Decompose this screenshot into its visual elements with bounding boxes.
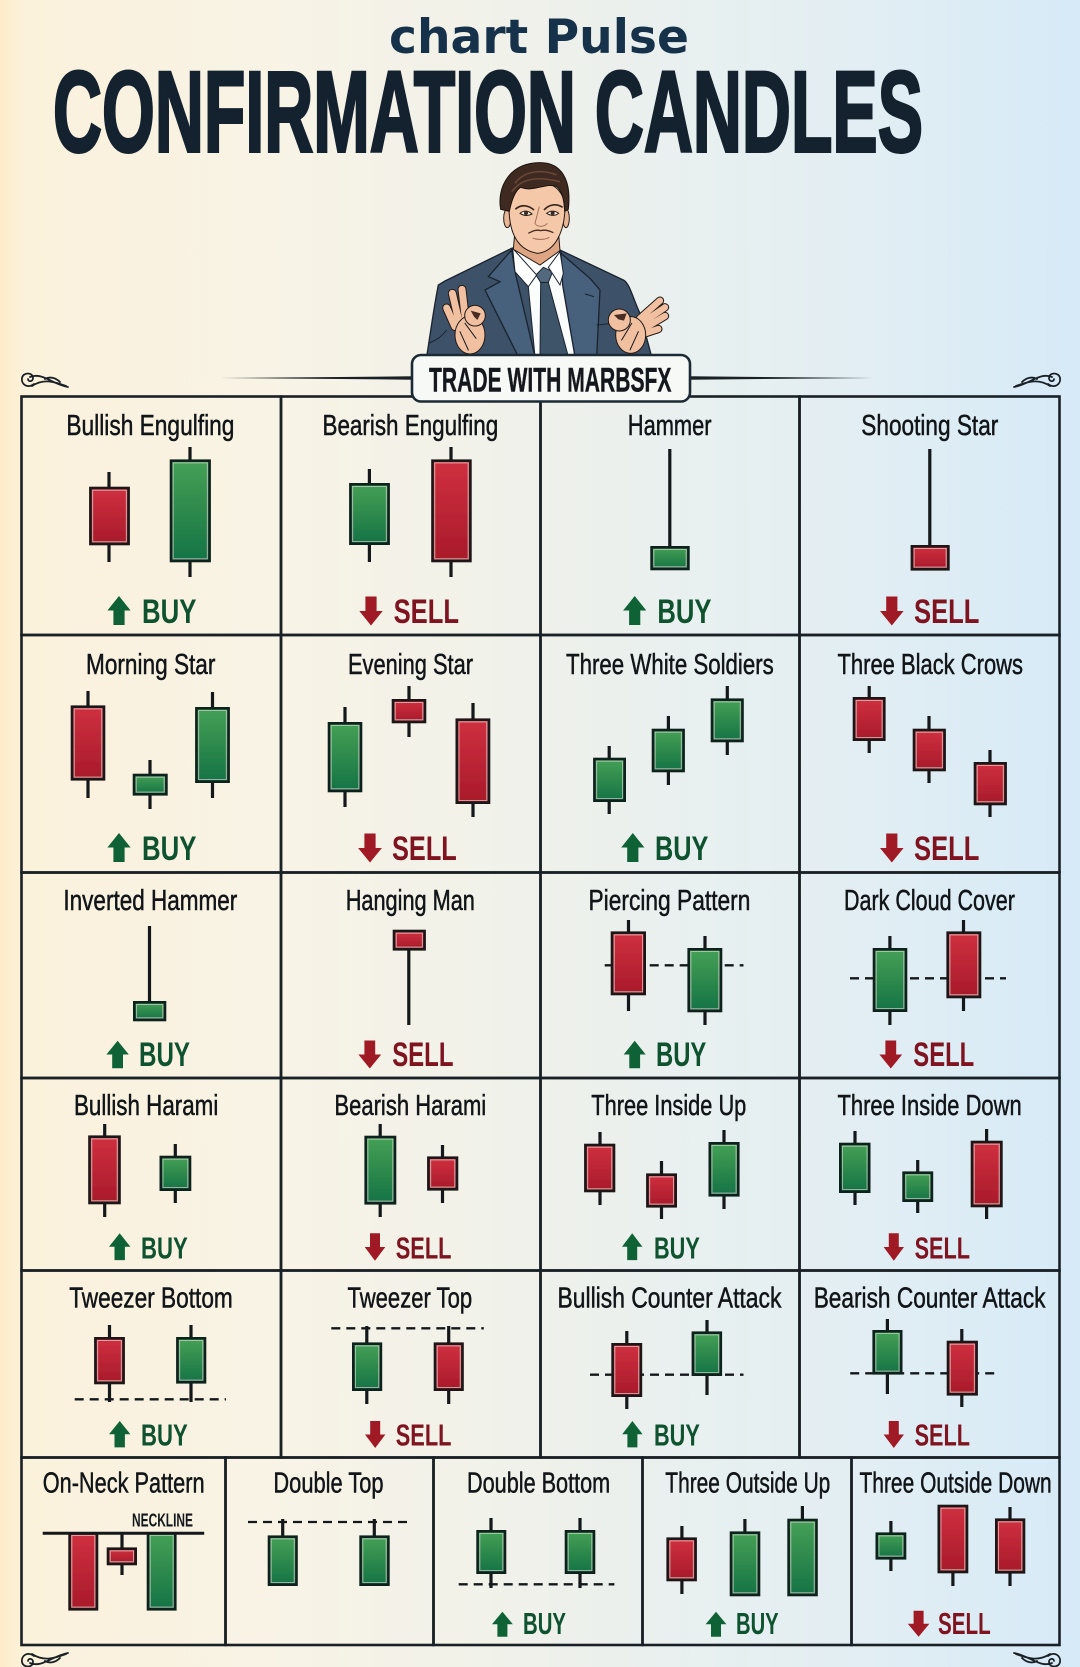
signal: BUY bbox=[622, 1417, 700, 1452]
banner rule: right bbox=[690, 376, 873, 380]
candlesticks bbox=[840, 1129, 1001, 1219]
signal: BUY: BUY bbox=[141, 1417, 188, 1452]
signal: SELL: SELL bbox=[914, 593, 979, 631]
signal: BUY: BUY bbox=[654, 1417, 700, 1452]
heading: Bearish Harami bbox=[334, 1090, 486, 1122]
signal: SELL: SELL bbox=[913, 1036, 974, 1074]
panel: Hammer bbox=[540, 396, 800, 635]
signal: SELL bbox=[884, 1417, 970, 1452]
heading: Piercing Pattern bbox=[588, 885, 750, 917]
candlesticks bbox=[350, 447, 470, 577]
signal: SELL bbox=[365, 1230, 452, 1265]
panel: Bearish Engulfing bbox=[281, 396, 540, 635]
signal: BUY: BUY bbox=[656, 1036, 707, 1074]
heading: Double Bottom bbox=[467, 1467, 610, 1499]
heading: Three Outside Up bbox=[665, 1467, 830, 1499]
signal: BUY bbox=[106, 1036, 190, 1074]
panel: Three White Soldiers bbox=[540, 635, 800, 872]
signal: SELL bbox=[358, 1036, 454, 1074]
signal: SELL bbox=[365, 1417, 452, 1452]
signal: SELL: SELL bbox=[394, 593, 459, 631]
panel: Three Inside Up bbox=[540, 1078, 800, 1270]
banner rule: left bbox=[220, 376, 412, 380]
signal: SELL bbox=[879, 1036, 974, 1074]
panel: Bearish Counter Attack bbox=[800, 1270, 1060, 1458]
panel: Bearish Harami bbox=[281, 1078, 540, 1270]
heading: Inverted Hammer bbox=[63, 885, 238, 917]
candlesticks bbox=[43, 1533, 204, 1609]
heading: Bearish Engulfing bbox=[322, 410, 498, 442]
signal: BUY: BUY bbox=[139, 1036, 190, 1074]
panel: Three Inside Down bbox=[800, 1078, 1060, 1270]
signal: BUY: BUY bbox=[141, 1230, 188, 1265]
panel: Three Black Crows bbox=[800, 635, 1060, 872]
heading: Bullish Harami bbox=[74, 1090, 218, 1122]
heading: Dark Cloud Cover bbox=[844, 885, 1015, 917]
signal: SELL bbox=[908, 1606, 991, 1641]
heading: Tweezer Bottom bbox=[69, 1282, 233, 1314]
panel: Dark Cloud Cover bbox=[800, 872, 1060, 1078]
heading: Hammer bbox=[628, 410, 712, 442]
signal: SELL: SELL bbox=[915, 1417, 970, 1452]
heading: Morning Star bbox=[86, 649, 216, 681]
signal: BUY bbox=[492, 1606, 566, 1641]
candlesticks bbox=[850, 1319, 1000, 1407]
panel: Bullish Harami bbox=[22, 1078, 281, 1270]
panel: Shooting Star bbox=[800, 396, 1060, 635]
heading: Three Black Crows bbox=[838, 649, 1023, 681]
signal: BUY: BUY bbox=[654, 1230, 700, 1265]
candlesticks bbox=[394, 931, 425, 1025]
signal: SELL bbox=[880, 593, 979, 631]
signal: SELL bbox=[359, 593, 459, 631]
panel: Three Outside Down bbox=[852, 1458, 1060, 1645]
banner: Trade With MarbsFX: TRADE WITH MARBSFX bbox=[429, 362, 672, 400]
signal: BUY: BUY bbox=[523, 1606, 566, 1641]
candlesticks bbox=[594, 686, 742, 814]
signal: SELL: SELL bbox=[392, 830, 457, 868]
panel: Bullish Engulfing bbox=[22, 396, 281, 635]
panel: Tweezer Top bbox=[281, 1270, 540, 1458]
candlesticks bbox=[329, 686, 489, 817]
candlesticks bbox=[652, 449, 688, 569]
panel: Inverted Hammer bbox=[22, 872, 281, 1078]
panel: On-Neck Pattern bbox=[22, 1458, 226, 1645]
signal: BUY: BUY bbox=[142, 830, 197, 868]
panel: Hanging Man bbox=[281, 872, 540, 1078]
illustration: man in suit making OK hand signs bbox=[427, 163, 665, 357]
heading: Three Inside Up bbox=[591, 1090, 746, 1122]
banner: Trade With MarbsFX bbox=[412, 355, 690, 402]
signal: SELL: SELL bbox=[392, 1036, 454, 1074]
signal: SELL: SELL bbox=[396, 1417, 452, 1452]
candlesticks bbox=[590, 1320, 744, 1409]
heading: Three Inside Down bbox=[838, 1090, 1022, 1122]
signal: SELL bbox=[884, 1230, 970, 1265]
ornament: top left bbox=[22, 374, 68, 387]
candlesticks bbox=[877, 1506, 1024, 1586]
heading: Double Top bbox=[273, 1467, 384, 1499]
heading: Tweezer Top bbox=[348, 1282, 472, 1314]
signal: SELL bbox=[358, 830, 457, 868]
panel: Three Outside Up bbox=[642, 1458, 852, 1645]
neckline label: NECKLINE bbox=[132, 1511, 193, 1531]
signal: SELL: SELL bbox=[938, 1606, 991, 1641]
candlesticks bbox=[854, 686, 1006, 817]
signal: BUY bbox=[109, 1417, 188, 1452]
ornament: bottom left bbox=[22, 1653, 68, 1666]
signal: BUY: BUY bbox=[142, 593, 197, 631]
signal: BUY bbox=[109, 1230, 188, 1265]
panel: Bullish Counter Attack bbox=[540, 1270, 800, 1458]
panel: Evening Star bbox=[281, 635, 540, 872]
signal: BUY bbox=[622, 1230, 700, 1265]
panel: Tweezer Bottom bbox=[22, 1270, 281, 1458]
signal: BUY bbox=[624, 1036, 707, 1074]
signal: BUY: BUY bbox=[736, 1606, 779, 1641]
signal: SELL: SELL bbox=[914, 830, 979, 868]
signal: BUY: BUY bbox=[655, 830, 709, 868]
candlesticks bbox=[331, 1326, 484, 1404]
heading: Evening Star bbox=[348, 649, 473, 681]
signal: SELL: SELL bbox=[396, 1230, 452, 1265]
signal: BUY bbox=[706, 1606, 779, 1641]
brand heading: chart Pulse bbox=[389, 10, 689, 65]
signal: BUY bbox=[107, 830, 197, 868]
signal: BUY: BUY bbox=[657, 593, 712, 631]
panel: Double Bottom bbox=[434, 1458, 642, 1645]
ornament: top right bbox=[1014, 374, 1060, 387]
signal: BUY bbox=[107, 593, 197, 631]
candlesticks bbox=[668, 1506, 816, 1595]
heading: Shooting Star bbox=[861, 410, 999, 442]
candlesticks bbox=[75, 1325, 226, 1402]
heading: Three White Soldiers bbox=[566, 649, 774, 681]
candlesticks bbox=[134, 926, 165, 1020]
candlesticks bbox=[850, 920, 1006, 1025]
panel: Morning Star bbox=[22, 635, 281, 872]
heading: Bullish Counter Attack bbox=[558, 1282, 782, 1314]
candlesticks bbox=[459, 1518, 614, 1588]
ornament: bottom right bbox=[1014, 1653, 1060, 1666]
signal: SELL bbox=[880, 830, 979, 868]
signal: BUY bbox=[621, 830, 709, 868]
candlesticks bbox=[366, 1124, 457, 1217]
heading: On-Neck Pattern bbox=[43, 1467, 205, 1499]
heading: Bullish Engulfing bbox=[66, 410, 234, 442]
candlesticks bbox=[585, 1130, 738, 1219]
signal: BUY bbox=[623, 593, 712, 631]
candlesticks bbox=[72, 691, 229, 809]
candlesticks bbox=[90, 1124, 190, 1217]
heading: Hanging Man bbox=[346, 885, 475, 917]
signal: SELL: SELL bbox=[915, 1230, 970, 1265]
candlesticks bbox=[605, 920, 744, 1025]
panel: Piercing Pattern bbox=[540, 872, 800, 1078]
candlesticks bbox=[912, 449, 948, 569]
panel: Double Top bbox=[226, 1458, 434, 1645]
candlesticks bbox=[90, 447, 210, 577]
candlesticks bbox=[248, 1519, 409, 1585]
